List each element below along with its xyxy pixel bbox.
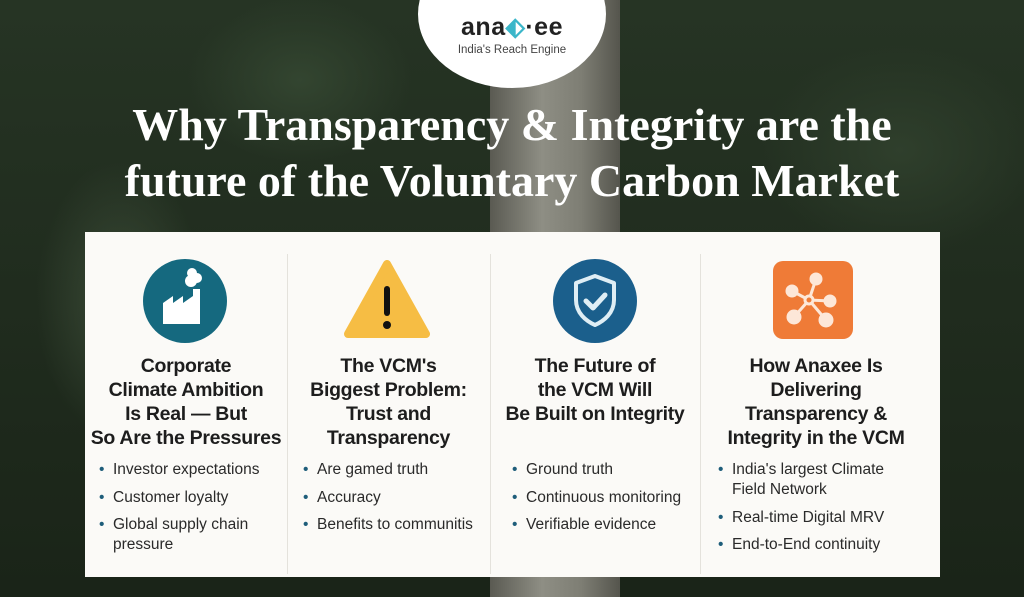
icon: network xyxy=(773,261,853,339)
panel: corporate ambition xyxy=(91,259,281,553)
panel: VCM problem xyxy=(304,260,473,533)
bullet list: Are gamed truth xyxy=(317,461,428,478)
panel: main card xyxy=(85,232,940,577)
icon: warning xyxy=(344,260,430,338)
heading: Corporate xyxy=(141,355,231,377)
heading: How Anaxee Is xyxy=(749,355,882,377)
title: future of the Voluntary Carbon Market xyxy=(125,155,899,206)
heading: Be Built on Integrity xyxy=(506,403,684,425)
panel: future integrity xyxy=(506,259,685,533)
heading: Transparency & xyxy=(745,403,887,425)
heading: The Future of xyxy=(535,355,655,377)
logo text: ana⬖·ee xyxy=(461,13,563,41)
bullet list xyxy=(718,461,884,553)
heading: the VCM Will xyxy=(538,379,652,401)
heading: Trust and xyxy=(346,403,431,425)
tagline: India's Reach Engine xyxy=(458,44,566,56)
bullet list: Verifiable evidence xyxy=(526,516,656,533)
heading: Climate Ambition xyxy=(109,379,263,401)
heading: The VCM's xyxy=(340,355,437,377)
heading xyxy=(727,355,905,449)
bullet list: India's largest Climate Field Network xyxy=(732,461,884,498)
heading xyxy=(91,355,281,449)
icon: factory xyxy=(143,259,227,343)
heading: Integrity in the VCM xyxy=(727,427,905,449)
title xyxy=(124,99,900,206)
icon: shield xyxy=(553,259,637,343)
panel: how anaxee delivers xyxy=(718,261,905,553)
bullet list: Customer loyalty xyxy=(113,488,228,506)
bullet list xyxy=(512,461,681,533)
logo badge xyxy=(418,0,606,88)
bullet list xyxy=(304,461,473,533)
title: Why Transparency & Integrity are the xyxy=(132,99,892,150)
bullet list: Real-time Digital MRV xyxy=(732,508,884,526)
bullet list: Global supply chain pressure xyxy=(113,516,248,553)
bullet list: End-to-End continuity xyxy=(732,536,880,553)
bullet list: Continuous monitoring xyxy=(526,488,681,506)
heading xyxy=(506,355,685,425)
heading xyxy=(310,355,467,449)
bullet list: Ground truth xyxy=(526,461,613,478)
bullet list: Investor expectations xyxy=(113,461,259,478)
heading: So Are the Pressures xyxy=(91,427,281,449)
bullet list xyxy=(100,461,259,553)
heading: Delivering xyxy=(770,379,862,401)
heading: Is Real — But xyxy=(125,403,247,425)
heading: Biggest Problem: xyxy=(310,379,467,401)
bullet list: Accuracy xyxy=(317,488,381,506)
bullet list: Benefits to communitis xyxy=(317,516,473,533)
heading: Transparency xyxy=(327,427,450,449)
